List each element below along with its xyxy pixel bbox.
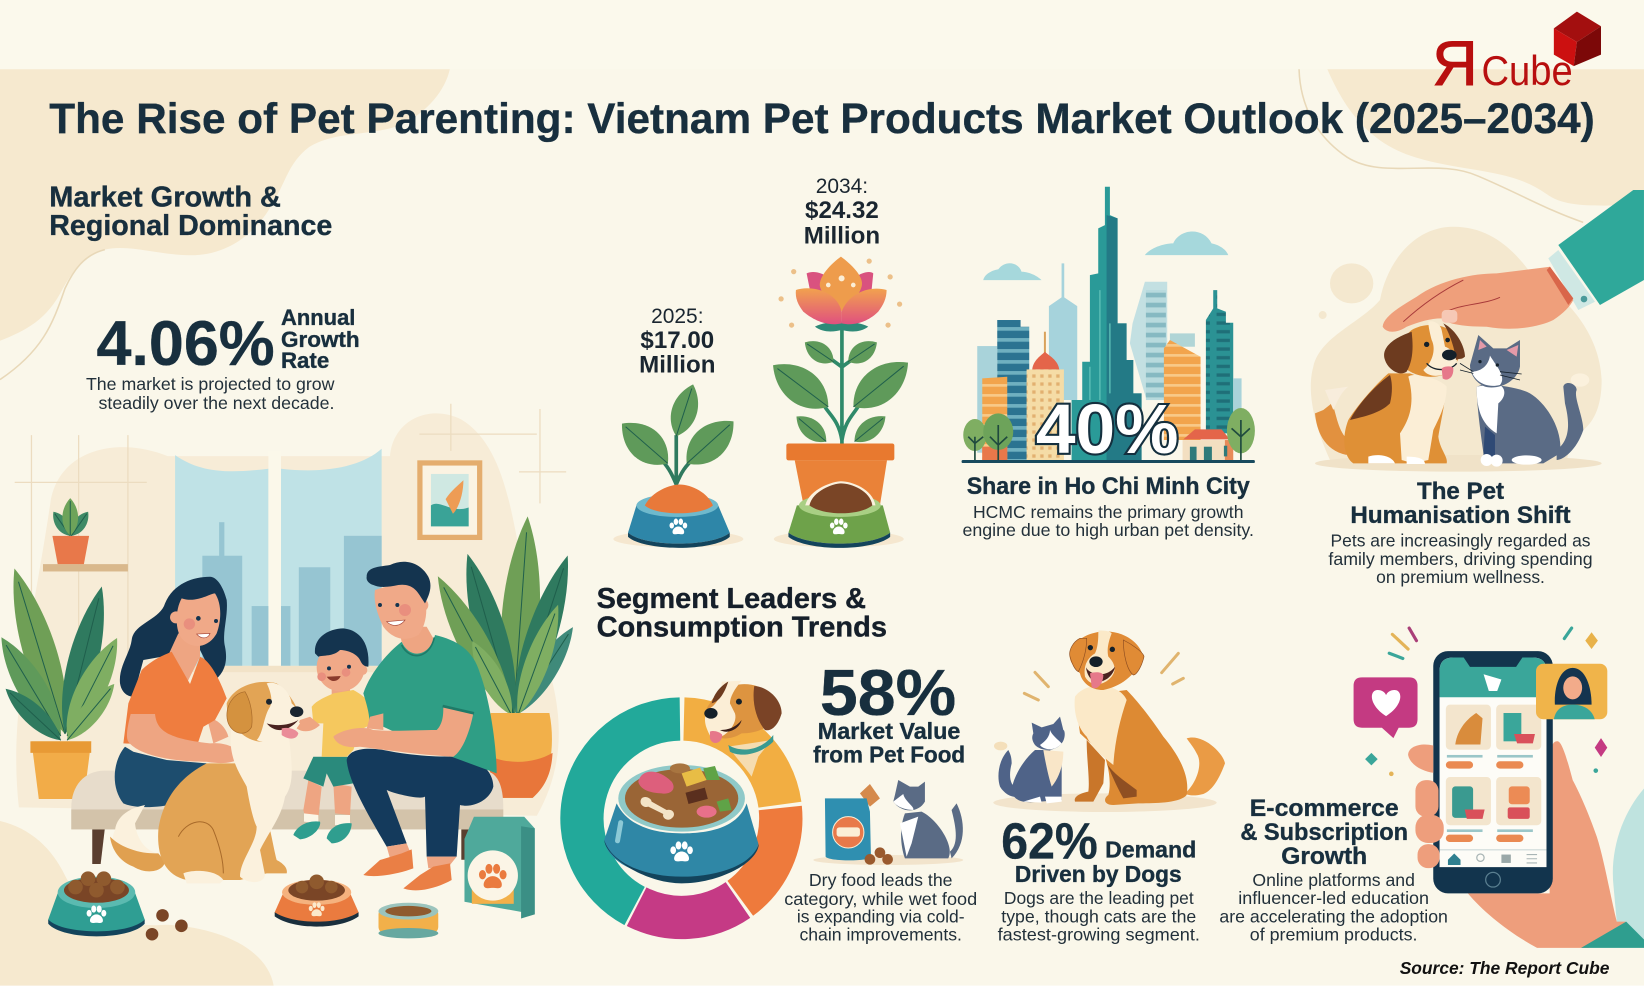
fingers xyxy=(1408,744,1444,868)
window xyxy=(175,449,382,672)
heading: E-commerce xyxy=(1250,795,1399,822)
cat xyxy=(1460,335,1589,467)
label: 2025: Million xyxy=(639,351,715,378)
left plant xyxy=(0,564,130,799)
illustration: skyline xyxy=(962,187,1255,463)
logo text: Я xyxy=(1432,29,1478,99)
panel: Ho Chi Minh City share xyxy=(962,187,1255,540)
description: The market is projected to grow xyxy=(86,374,335,394)
description: fastest-growing segment. xyxy=(998,925,1200,945)
stat: annual growth rate xyxy=(86,305,360,413)
logo text: Cube xyxy=(1481,47,1573,94)
light teal backdrop xyxy=(1613,788,1644,939)
background blob: top right xyxy=(1327,69,1644,206)
title: The Rise of Pet Parenting: Vietnam Pet Products Market Outlook (2025–2034) xyxy=(49,95,1595,143)
description: steadily over the next decade. xyxy=(99,393,334,413)
family figures xyxy=(110,562,497,890)
shelf with small plant xyxy=(43,498,128,571)
chart: market size growth xyxy=(611,175,919,548)
description: type, though cats are the xyxy=(1001,907,1196,927)
description: influencer-led education xyxy=(1238,888,1429,908)
dog xyxy=(110,682,303,883)
sparkles and dashes xyxy=(1365,628,1607,776)
description: Pets are increasingly regarded as xyxy=(1331,530,1591,550)
icon: sprout in bowl xyxy=(611,380,745,548)
heading: Share in Ho Chi Minh City xyxy=(967,473,1250,500)
illustration: dog and cat xyxy=(993,631,1225,812)
description: engine due to high urban pet density. xyxy=(962,520,1254,540)
label: Annual xyxy=(281,305,355,330)
pet food bag xyxy=(464,817,535,919)
panel: e-commerce and subscription growth xyxy=(1219,628,1644,948)
description: Online platforms and xyxy=(1252,870,1415,890)
description: is expanding via cold- xyxy=(797,907,965,927)
background blob: top left xyxy=(0,69,450,341)
label: Demand xyxy=(1105,837,1196,863)
heart bubble xyxy=(1354,677,1418,738)
label: Market Value xyxy=(818,718,961,744)
wall xyxy=(16,413,559,816)
palm and thumb xyxy=(1468,741,1626,948)
background blob: bottom left xyxy=(0,821,274,986)
description: HCMC remains the primary growth xyxy=(973,502,1243,522)
illustration: hand petting dog and cat xyxy=(1311,190,1644,472)
description: chain improvements. xyxy=(799,925,962,945)
dog xyxy=(1315,321,1465,464)
child xyxy=(293,628,383,843)
dog peeking xyxy=(704,681,782,777)
panel: demand by dogs xyxy=(993,631,1225,945)
description: Dogs are the leading pet xyxy=(1004,888,1194,908)
heading: segment leaders: Consumption Trends xyxy=(597,610,887,642)
description: family members, driving spending xyxy=(1328,549,1593,569)
heading: segment leaders: Segment Leaders & xyxy=(597,582,866,614)
donut chart with dog and bowl xyxy=(582,681,963,917)
label: Rate xyxy=(281,348,329,373)
description: are accelerating the adoption xyxy=(1219,907,1448,927)
teal bowl with kibble xyxy=(48,871,188,941)
source note: Source: The Report Cube xyxy=(1400,958,1609,978)
picture frame xyxy=(417,460,482,540)
panel: pet food share xyxy=(582,656,977,945)
heading: market growth: Regional Dominance xyxy=(49,209,332,241)
mother xyxy=(115,577,242,807)
description: on premium wellness. xyxy=(1376,567,1545,587)
cat xyxy=(893,780,963,858)
bench xyxy=(71,771,503,864)
donut segments xyxy=(582,719,781,917)
label: 2034: 2034: xyxy=(816,175,868,198)
heading: The Pet xyxy=(1417,478,1504,505)
heading: Growth xyxy=(1281,843,1367,870)
food can xyxy=(378,903,438,938)
label: Driven by Dogs xyxy=(1015,861,1182,887)
hand xyxy=(1383,267,1573,332)
food bag xyxy=(813,784,963,865)
father xyxy=(333,562,497,890)
heading: Humanisation Shift xyxy=(1350,502,1571,529)
description: Dry food leads the xyxy=(809,870,953,890)
logo cube xyxy=(1554,12,1601,66)
description: category, while wet food xyxy=(784,889,977,909)
panel: pet humanisation shift xyxy=(1311,190,1644,587)
illustration: family with dog in living room xyxy=(0,404,583,941)
food bowl xyxy=(604,763,759,883)
flower head xyxy=(796,257,887,331)
label: 2025: $17.00 xyxy=(640,327,714,354)
icon: flowering plant in pot with bowl xyxy=(763,257,919,548)
sleeve xyxy=(1581,922,1644,948)
label: 2034: $24.32 xyxy=(805,197,879,224)
value: 40%: 40% xyxy=(1036,390,1178,468)
label: from Pet Food xyxy=(813,741,965,767)
label: 2025: 2025: xyxy=(651,305,704,328)
label: 2034: Million xyxy=(804,222,880,249)
value: 4.06% xyxy=(96,309,275,379)
logo: Report Cube xyxy=(1432,12,1601,99)
heading: & Subscription xyxy=(1240,819,1408,846)
description: of premium products. xyxy=(1250,925,1418,945)
value: 62%: 62% xyxy=(1001,812,1098,870)
label: Growth xyxy=(281,327,360,352)
right plant xyxy=(425,515,583,798)
phone xyxy=(1433,651,1553,893)
orange bowl with kibble xyxy=(275,874,359,927)
value: 58%: 58% xyxy=(820,656,956,729)
influencer card xyxy=(1536,664,1607,719)
heading: market growth: Market Growth & xyxy=(49,181,281,213)
